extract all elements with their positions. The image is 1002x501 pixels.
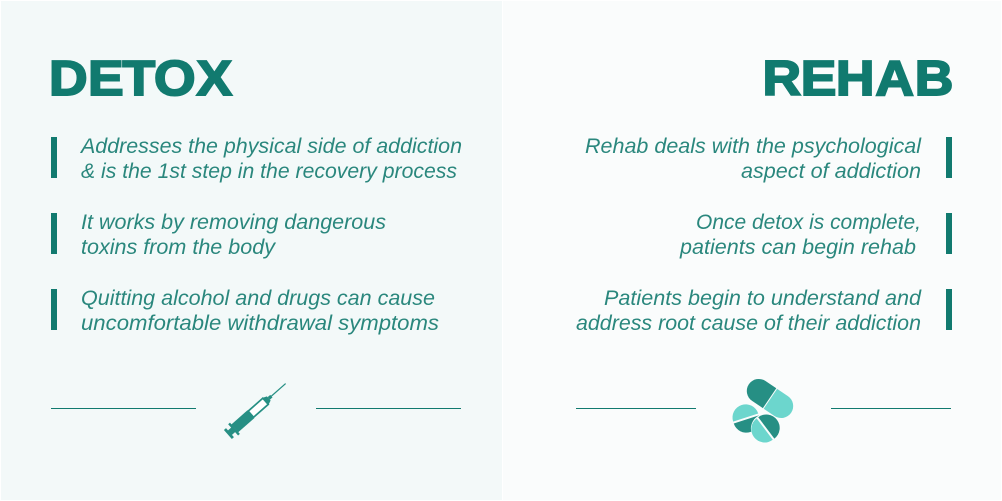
icon: pills [729, 374, 798, 449]
bullet: withdrawal: Quitting alcohol and drugs can cause [81, 287, 435, 310]
bullet: removing toxins: It works by removing dangerous [81, 211, 387, 234]
bullet: physical side: & is the 1st step in the recovery process [81, 160, 458, 183]
bullet: psychological aspect [585, 135, 952, 183]
bullet: physical side [51, 135, 462, 183]
right tablet [745, 408, 786, 449]
bullet: root cause: address root cause of their addiction [576, 312, 921, 335]
bullet: removing toxins [51, 211, 387, 259]
bullet: begin rehab [679, 211, 952, 259]
bullet: withdrawal [51, 287, 440, 335]
panel: detox [1, 1, 502, 500]
bullet: physical side: Addresses the physical side of addiction [79, 135, 462, 158]
bullet: root cause [576, 287, 952, 335]
capsule [742, 374, 798, 423]
panel: rehab [503, 1, 1001, 500]
heading: rehab: REHAB [762, 50, 953, 106]
bullet: begin rehab: patients can begin rehab [679, 236, 916, 259]
icon: syringe [223, 378, 291, 440]
bullet: psychological aspect: Rehab deals with the psychological [585, 135, 922, 158]
heading: detox: DETOX [49, 50, 232, 106]
bullet: withdrawal: uncomfortable withdrawal symptoms [81, 312, 440, 335]
bullet: root cause: Patients begin to understand and [604, 287, 922, 310]
bullet: psychological aspect: aspect of addiction [741, 160, 921, 183]
left tablet [729, 401, 763, 436]
bullet: begin rehab: Once detox is complete, [696, 211, 921, 234]
bullet: removing toxins: toxins from the body [81, 236, 277, 259]
